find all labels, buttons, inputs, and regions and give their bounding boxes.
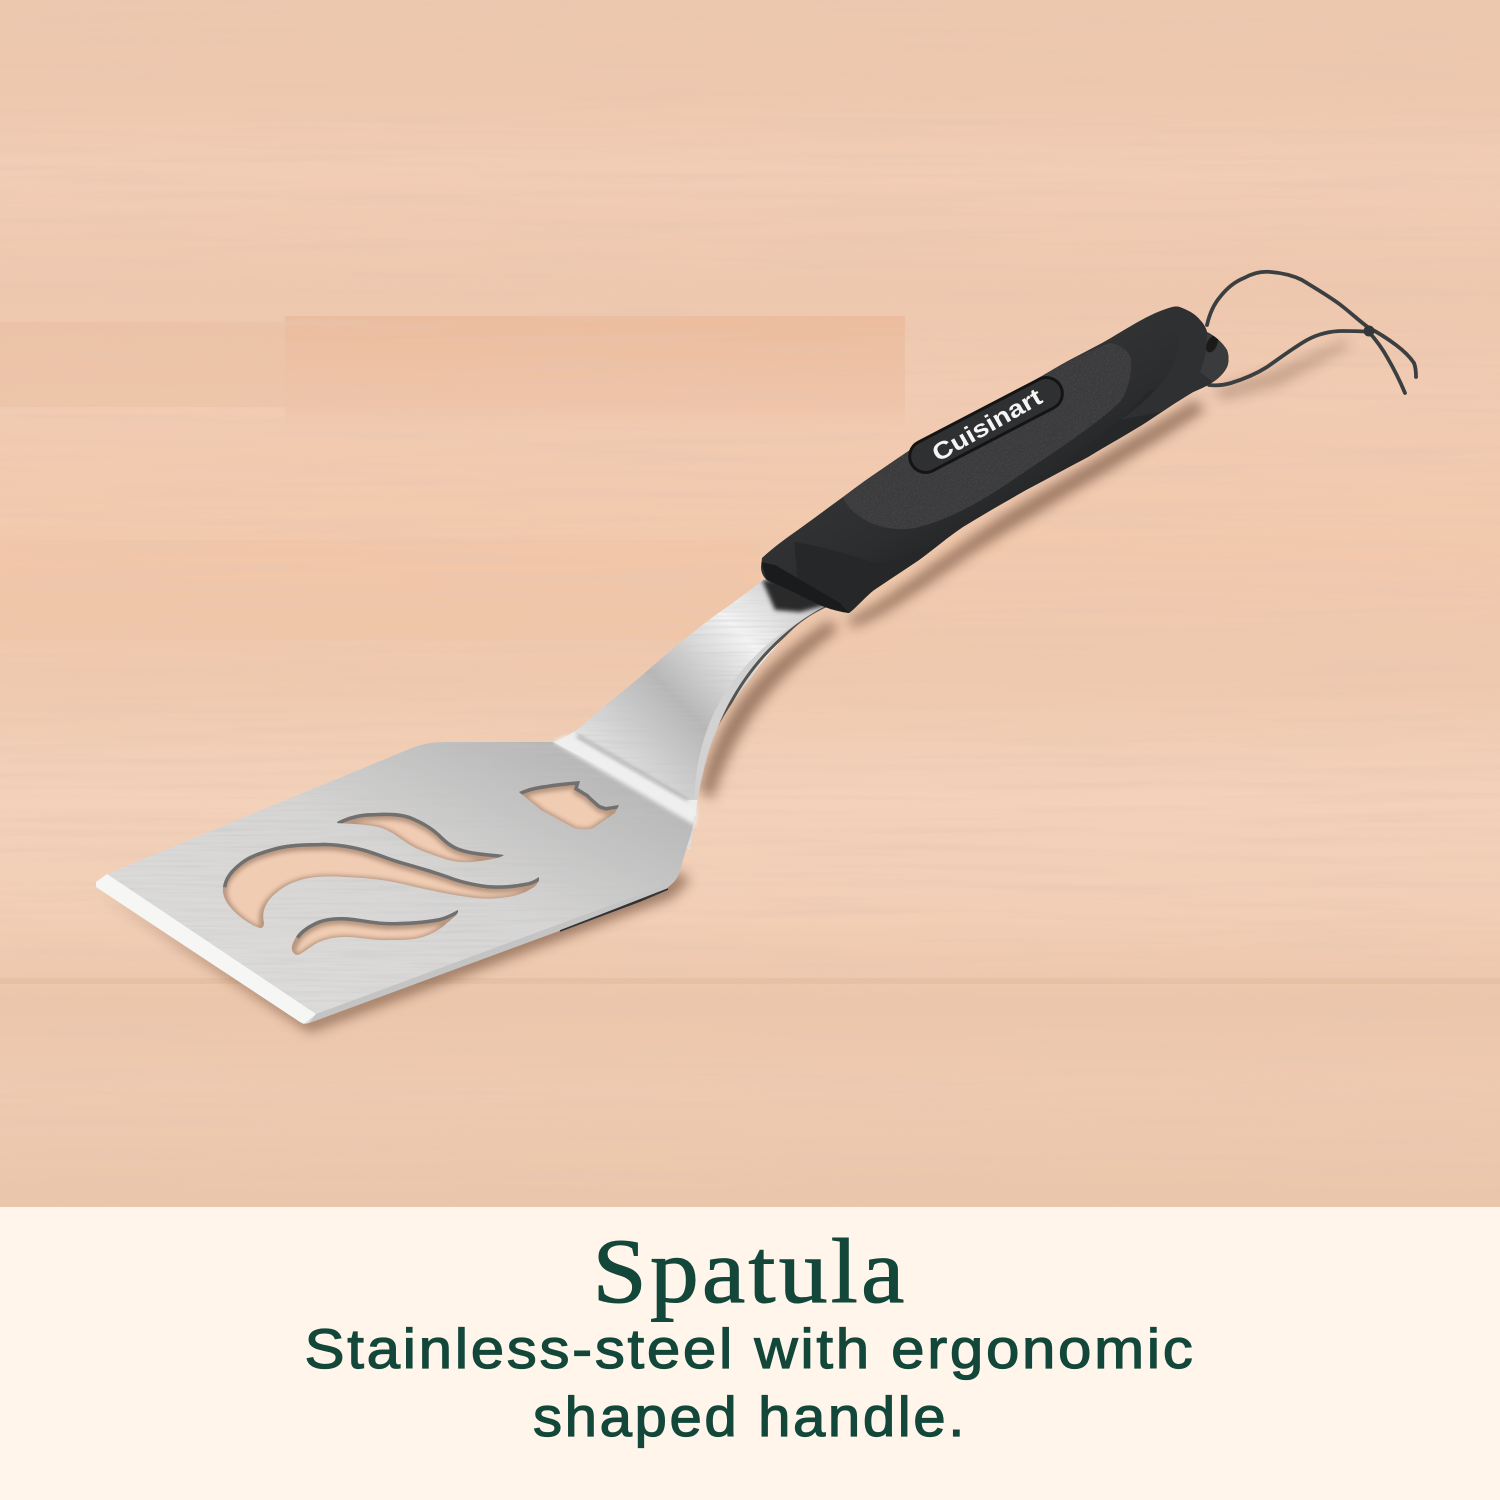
handle (750, 272, 1416, 640)
neck side wall (696, 624, 796, 791)
spatula (96, 340, 1350, 1032)
blade cutouts: flames and bottle opener (223, 781, 619, 958)
spatula blade (96, 742, 696, 1024)
subtitle: Stainless-steel with ergonomic (304, 1317, 1196, 1380)
end cap (1122, 306, 1228, 420)
end cap hole (1206, 336, 1218, 352)
handle body (761, 306, 1228, 613)
neck dark transition near handle (762, 580, 830, 612)
lower dark band (794, 386, 1207, 613)
neck crease highlight (568, 732, 698, 828)
neck-end chamfer (761, 562, 849, 613)
string knot (1364, 326, 1374, 336)
subtitle: shaped handle. (533, 1385, 967, 1448)
textured grip zone (843, 343, 1131, 529)
logo badge: Cuisinart (928, 384, 1047, 467)
subtitle (304, 1317, 1196, 1448)
blade base highlight band (553, 735, 697, 826)
caption panel (304, 1220, 1196, 1448)
string loop (1207, 272, 1416, 393)
blade lower edge (309, 884, 668, 1023)
spatula neck (553, 579, 826, 850)
spatula cast shadow (100, 340, 1350, 1032)
blade bevel edge (96, 874, 316, 1024)
title: Spatula (592, 1220, 908, 1322)
logo badge (904, 372, 1068, 478)
